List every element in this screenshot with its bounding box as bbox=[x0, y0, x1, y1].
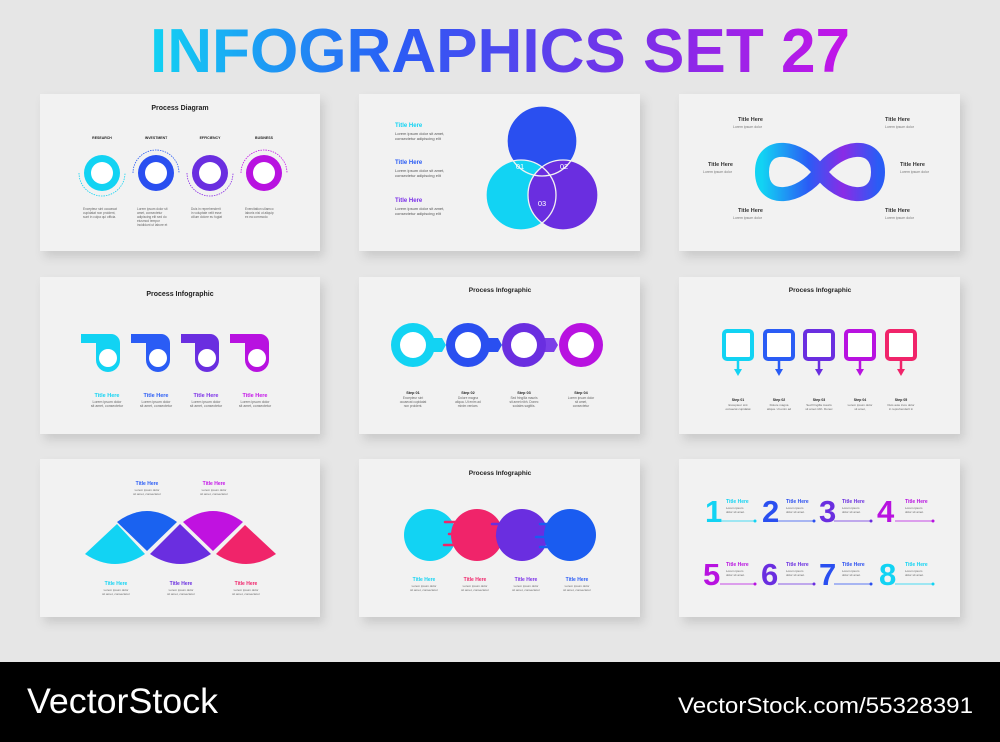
panel: numbered list: Lorem ipsum bbox=[726, 569, 744, 573]
panel: wave petals: Lorem ipsum dolor bbox=[202, 488, 226, 492]
panel: process diagram: ex ea commodo bbox=[245, 215, 268, 219]
panel: wave petals: Title Here bbox=[170, 581, 193, 587]
footer bar: VectorStock.com/55328391 bbox=[678, 693, 973, 718]
panel: square pins: in reprehenderit in bbox=[889, 407, 913, 411]
panel: infinity: Lorem ipsum dolor bbox=[733, 125, 763, 129]
panel: numbered list: dolor sit amet. bbox=[786, 510, 805, 514]
panel: square pins: Duis aute irure dolor bbox=[887, 403, 915, 407]
panel: circle steps: Excepteur sint bbox=[403, 396, 423, 400]
panel: circle steps: occaecat cupidatat bbox=[400, 400, 426, 404]
panel: venn diagram: consectetur adipiscing elit bbox=[395, 173, 442, 178]
panel: overlapping circles: sit amet, consectetur bbox=[410, 588, 438, 592]
panel: ribbon tabs: Lorem ipsum dolor bbox=[241, 400, 270, 404]
panel: circle steps: Lorem ipsum dolor bbox=[568, 396, 595, 400]
panel: infinity: Title Here bbox=[885, 117, 910, 123]
panel: circle steps: minim veniam. bbox=[458, 404, 478, 408]
panel: numbered list: Title Here bbox=[786, 499, 809, 505]
panel: ribbon tabs: Title Here bbox=[144, 393, 168, 399]
panel: circle steps: sit amet nibh. Donec bbox=[509, 400, 539, 404]
panel: process diagram: adipiscing elit sed do bbox=[137, 215, 167, 219]
panel: numbered list: 1 bbox=[705, 494, 722, 529]
panel: square pins: Sed fringilla mauris bbox=[806, 403, 832, 407]
panel: infinity: Lorem ipsum dolor bbox=[733, 216, 763, 220]
panel: ribbon tabs: Lorem ipsum dolor bbox=[93, 400, 122, 404]
panel: ribbon tabs: sit amet, consectetur bbox=[140, 404, 173, 408]
panel: overlapping circles: Title Here bbox=[566, 577, 589, 583]
panel: process diagram: Duis in reprehenderit bbox=[191, 207, 221, 211]
panel: wave petals: Title Here bbox=[105, 581, 128, 587]
panel: numbered list: 4 bbox=[877, 494, 895, 529]
panel: numbered list: Title Here bbox=[726, 562, 749, 568]
panel: numbered list: Lorem ipsum bbox=[905, 569, 923, 573]
panel: numbered list: dolor sit amet. bbox=[726, 510, 745, 514]
panel: ribbon tabs: Title Here bbox=[243, 393, 267, 399]
panel: overlapping circles: sit amet, consectetur bbox=[563, 588, 591, 592]
panel: overlapping circles: Lorem ipsum dolor bbox=[412, 584, 436, 588]
panel: square pins: aliqua. Ut enim ad bbox=[767, 407, 791, 411]
panel: numbered list: Lorem ipsum bbox=[842, 506, 860, 510]
panel: circle steps: Step 02 bbox=[461, 391, 475, 395]
panel: circle steps bbox=[359, 277, 640, 434]
panel: wave petals: Lorem ipsum dolor bbox=[169, 588, 193, 592]
panel: venn diagram: Title Here bbox=[395, 123, 423, 129]
panel: process diagram: EFFICIENCY bbox=[200, 136, 221, 140]
panel: venn diagram: Title Here bbox=[395, 198, 423, 204]
panel: numbered list: dolor sit amet. bbox=[842, 510, 861, 514]
panel: ribbon tabs bbox=[40, 277, 320, 434]
panel: numbered list: Title Here bbox=[905, 562, 928, 568]
panel: wave petals: Title Here bbox=[235, 581, 258, 587]
panel: numbered list: Lorem ipsum bbox=[726, 506, 744, 510]
panel: overlapping circles: Title Here bbox=[413, 577, 436, 583]
panel: circle steps: Sed fringilla mauris bbox=[510, 396, 538, 400]
panel: venn diagram: consectetur adipiscing elit bbox=[395, 136, 442, 141]
panel: numbered list: 6 bbox=[761, 557, 778, 592]
panel: process diagram: BUSINESS bbox=[255, 136, 274, 140]
panel: wave petals: Lorem ipsum dolor bbox=[234, 588, 258, 592]
panel: numbered list: Title Here bbox=[786, 562, 809, 568]
panel: numbered list: Title Here bbox=[726, 499, 749, 505]
panel: numbered list: 2 bbox=[762, 494, 779, 529]
panel: overlapping circles: Title Here bbox=[464, 577, 487, 583]
panel: circle steps: Process Infographic bbox=[469, 287, 532, 294]
panel: overlapping circles: Title Here bbox=[515, 577, 538, 583]
panel: wave petals: Lorem ipsum dolor bbox=[104, 588, 128, 592]
panel: venn diagram: Title Here bbox=[395, 160, 423, 166]
panel: venn diagram: Lorem ipsum dolor sit amet, bbox=[395, 168, 444, 173]
panel: numbered list: Lorem ipsum bbox=[905, 506, 923, 510]
panel: wave petals: Title Here bbox=[203, 481, 226, 487]
panel: square pins: Step 05 bbox=[895, 398, 907, 402]
panel: ribbon tabs: Lorem ipsum dolor bbox=[192, 400, 221, 404]
footer bar: VectorStock bbox=[27, 682, 219, 721]
panel: process diagram: cillum dolore eu fugiat bbox=[191, 215, 222, 219]
panel: venn diagram: 02 bbox=[560, 162, 568, 171]
panel: square pins: Lorem ipsum dolor bbox=[848, 403, 872, 407]
footer bar bbox=[0, 662, 1000, 742]
panel: square pins: Step 01 bbox=[732, 398, 744, 402]
panel: infinity: Lorem ipsum dolor bbox=[885, 125, 915, 129]
panel: circle steps: Step 01 bbox=[406, 391, 420, 395]
panel: infinity: Title Here bbox=[738, 208, 763, 214]
panel: process diagram: amet, consectetur bbox=[137, 211, 163, 215]
panel: circle steps: sit amet, bbox=[575, 400, 587, 404]
panel: ribbon tabs: Lorem ipsum dolor bbox=[142, 400, 171, 404]
panel: venn diagram: 03 bbox=[538, 199, 546, 208]
panel: numbered list: dolor sit amet. bbox=[905, 510, 924, 514]
panel: numbered list: dolor sit amet. bbox=[905, 573, 924, 577]
panel: process diagram: RESEARCH bbox=[92, 136, 112, 140]
panel: process diagram: INVESTMENT bbox=[145, 136, 168, 140]
panel: wave petals: sit amet, consectetur bbox=[200, 492, 228, 496]
panel: process diagram: in voluptate velit esse bbox=[191, 211, 222, 215]
panel: numbered list bbox=[679, 459, 960, 617]
panel: process diagram bbox=[40, 94, 320, 251]
panel: numbered list: 7 bbox=[819, 557, 836, 592]
panel: circle steps: non proident. bbox=[404, 404, 422, 408]
panel: process diagram: Process Diagram bbox=[151, 105, 209, 112]
panel: infinity: Title Here bbox=[708, 162, 733, 168]
panel: square pins: Excepteur sint bbox=[728, 403, 748, 407]
panel: wave petals: Title Here bbox=[136, 481, 159, 487]
panel: square pins: Process Infographic bbox=[789, 287, 852, 294]
panel: infinity: Lorem ipsum dolor bbox=[900, 170, 930, 174]
panel: numbered list: Title Here bbox=[842, 499, 865, 505]
panel: infinity: Title Here bbox=[885, 208, 910, 214]
panel: numbered list: 5 bbox=[703, 557, 720, 592]
panel: infinity: Title Here bbox=[900, 162, 925, 168]
panel: numbered list: dolor sit amet. bbox=[726, 573, 745, 577]
panel: square pins: Step 03 bbox=[813, 398, 825, 402]
panel: ribbon tabs: Process Infographic bbox=[146, 291, 214, 298]
panel: overlapping circles: sit amet, consectetur bbox=[461, 588, 489, 592]
panel: circle steps: Dolore magna bbox=[458, 396, 478, 400]
panel: wave petals: sit amet, consectetur bbox=[133, 492, 161, 496]
panel: overlapping circles: Lorem ipsum dolor bbox=[463, 584, 487, 588]
panel: process diagram: sunt in culpa qui officia. bbox=[83, 215, 116, 219]
panel: square pins: sit amet, bbox=[854, 407, 866, 411]
panel: square pins: Dolore magna bbox=[770, 403, 789, 407]
panel: numbered list: Lorem ipsum bbox=[786, 506, 804, 510]
panel: square pins: sit amet nibh. Donec bbox=[805, 407, 833, 411]
panel: process diagram: Excepteur sint occaecat bbox=[83, 207, 117, 211]
panel: ribbon tabs: Title Here bbox=[95, 393, 119, 399]
panel: infinity: Title Here bbox=[738, 117, 763, 123]
panel: wave petals: Lorem ipsum dolor bbox=[135, 488, 159, 492]
panel: infinity: Lorem ipsum dolor bbox=[885, 216, 915, 220]
panel: process diagram: laboris nisi ut aliquip bbox=[245, 211, 274, 215]
title: INFOGRAPHICS SET 27 bbox=[150, 17, 850, 86]
panel: wave petals: sit amet, consectetur bbox=[167, 592, 195, 596]
panel: numbered list: Lorem ipsum bbox=[786, 569, 804, 573]
panel: wave petals bbox=[40, 459, 320, 617]
panel: overlapping circles: sit amet, consectetur bbox=[512, 588, 540, 592]
panel: overlapping circles: Lorem ipsum dolor bbox=[565, 584, 589, 588]
panel: process diagram: cupidatat non proident, bbox=[83, 211, 116, 215]
panel: wave petals: sit amet, consectetur bbox=[102, 592, 130, 596]
panel: infinity: Lorem ipsum dolor bbox=[703, 170, 733, 174]
panel: process diagram: Lorem ipsum dolor sit bbox=[137, 207, 168, 211]
panel: numbered list: dolor sit amet. bbox=[786, 573, 805, 577]
panel: ribbon tabs: sit amet, consectetur bbox=[190, 404, 223, 408]
panel: ribbon tabs: sit amet, consectetur bbox=[239, 404, 272, 408]
panel: process diagram: eiusmod tempor bbox=[137, 219, 161, 223]
panel: overlapping circles: Process Infographic bbox=[469, 470, 532, 477]
panel: venn diagram: Lorem ipsum dolor sit amet, bbox=[395, 206, 444, 211]
panel: numbered list: 8 bbox=[879, 557, 896, 592]
panel: ribbon tabs: Title Here bbox=[194, 393, 218, 399]
panel: square pins: Step 02 bbox=[773, 398, 785, 402]
panel: numbered list: Lorem ipsum bbox=[842, 569, 860, 573]
panel: circle steps: aliqua. Ut enim ad bbox=[455, 400, 481, 404]
panel: wave petals: sit amet, consectetur bbox=[232, 592, 260, 596]
panel: infinity bbox=[679, 94, 960, 251]
panel: circle steps: consectetur bbox=[573, 404, 590, 408]
panel: circle steps: sodales sagittis. bbox=[513, 404, 535, 408]
panel: venn diagram: Lorem ipsum dolor sit amet, bbox=[395, 131, 444, 136]
panel: venn diagram bbox=[0, 0, 640, 251]
panel: process diagram: Exercitation ullamco bbox=[245, 207, 274, 211]
panel: square pins: occaecat cupidatat bbox=[725, 407, 751, 411]
panel: circle steps: Step 03 bbox=[517, 391, 531, 395]
panel: venn diagram: consectetur adipiscing elit bbox=[395, 211, 442, 216]
panel: numbered list: Title Here bbox=[842, 562, 865, 568]
panel: circle steps: Step 04 bbox=[574, 391, 589, 395]
panel: numbered list: Title Here bbox=[905, 499, 928, 505]
panel: numbered list: 3 bbox=[819, 494, 836, 529]
panel: process diagram: incididunt ut labore et bbox=[137, 223, 167, 227]
panel: square pins: Step 04 bbox=[854, 398, 866, 402]
panel: venn diagram: 01 bbox=[516, 162, 524, 171]
panel: overlapping circles: Lorem ipsum dolor bbox=[514, 584, 538, 588]
panel: square pins bbox=[679, 277, 960, 434]
panel: overlapping circles bbox=[359, 459, 640, 617]
panel: ribbon tabs: sit amet, consectetur bbox=[91, 404, 124, 408]
panel: numbered list: dolor sit amet. bbox=[842, 573, 861, 577]
